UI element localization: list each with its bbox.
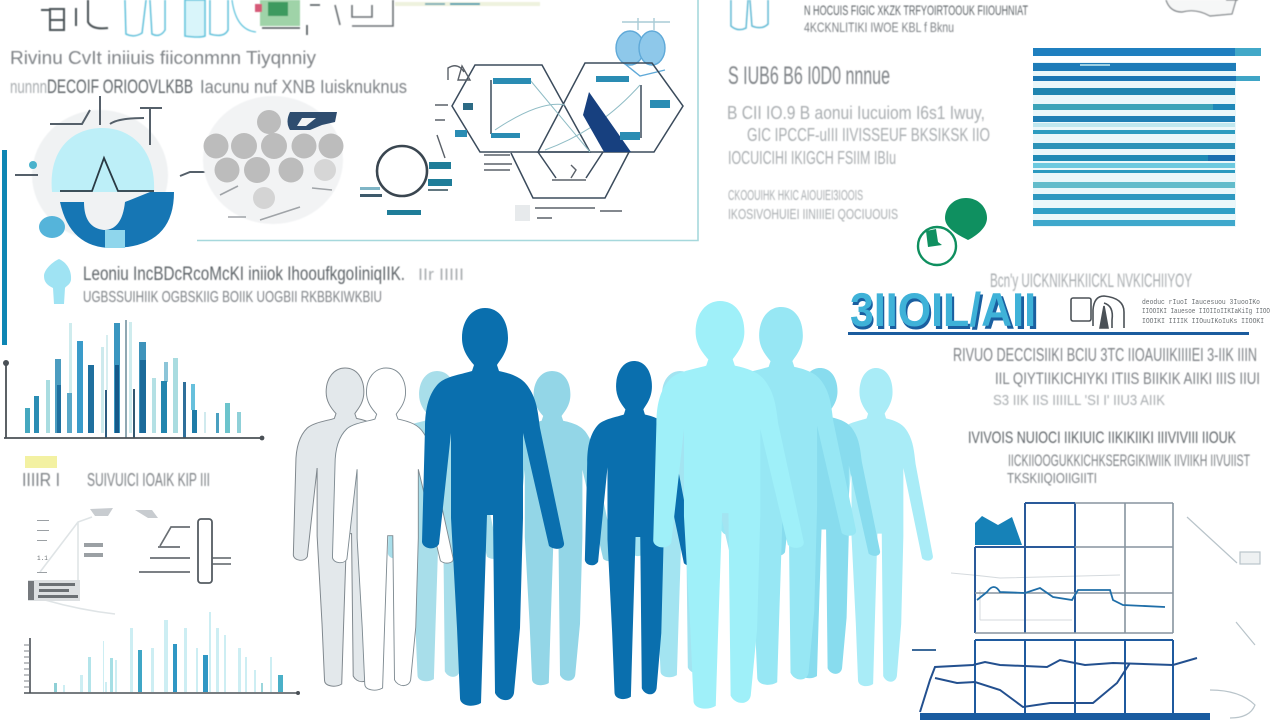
pin text line two: UGBSSUIHIIK OGBSKIIG BOIIK UOGBII RKBBKIWKBIU <box>83 289 382 306</box>
pin text faded: IIr IIIII <box>418 265 464 284</box>
yellow highlight <box>25 456 57 468</box>
path with leaders <box>139 527 190 572</box>
grid lines <box>975 640 1173 713</box>
icon: light blue pin <box>44 259 71 304</box>
chart: upper grid with line <box>951 503 1173 633</box>
icon: cropped map outline <box>1166 0 1238 16</box>
person: dark blue small <box>585 361 696 699</box>
icon: cropped dark glyphs <box>41 0 108 30</box>
person: light blue back <box>388 371 499 681</box>
trend line lower <box>935 663 1130 707</box>
text block: middle right <box>727 62 990 223</box>
icon: ring with labels <box>360 146 452 215</box>
big title: 3IIOIL/AII <box>850 283 1036 336</box>
green pin <box>945 198 987 240</box>
sketch: faint map lines <box>1187 517 1260 718</box>
person: pale right back <box>831 368 933 686</box>
first paragraph line three: S3 IIK IIS IIIILL 'SI I' IIU3 AIIK <box>993 392 1165 409</box>
ring <box>377 146 427 196</box>
person: bright aqua front <box>653 301 804 709</box>
heading line two: nunnn <box>10 77 47 97</box>
text block: pin row <box>44 259 464 306</box>
big title shadow: 3IIOIL/AII <box>851 286 1039 339</box>
icon: grey circle cluster <box>203 96 344 224</box>
axis ticks <box>24 645 30 687</box>
hexagon outlines <box>452 63 683 198</box>
person: aqua left back <box>631 371 742 677</box>
text block: title area <box>848 271 1270 339</box>
pale backdrop <box>32 110 168 240</box>
dark parallelogram <box>583 92 631 152</box>
icon: cropped light blue legs <box>125 0 256 37</box>
paragraph line one: B CII IO.9 B aonui Iucuiom I6s1 Iwuy, <box>727 103 985 123</box>
paragraph line five: IKOSIVOHUIEI IINIIIEI QOCIUOUIS <box>728 206 898 223</box>
top line two: 4KCKNLITIKI IWOE KBL f Bknu <box>804 19 954 35</box>
heading line two bold: DECOIF ORIOOVLKBB <box>47 77 193 98</box>
second paragraph line three: TKSKIIQIOIIGIITI <box>1007 470 1097 487</box>
pale block <box>515 205 530 221</box>
green flag <box>926 229 942 247</box>
bars <box>54 612 283 692</box>
person: teal back <box>502 371 615 685</box>
small glyphs <box>435 66 622 218</box>
labels <box>360 162 452 215</box>
top strip: cropped icons <box>41 0 1238 37</box>
icon: monitor and arch <box>1071 296 1124 328</box>
icon: cropped green chip <box>255 0 320 35</box>
paragraph line four: CKOOUIHK HKIC AIOUIEI3IOOIS <box>728 187 863 204</box>
grey wedges <box>90 508 158 518</box>
trend line upper <box>920 658 1197 712</box>
top strip colour <box>395 2 540 6</box>
stripe backdrop <box>1033 62 1236 227</box>
dark lower ring <box>60 192 174 248</box>
paragraph line two: GIC IPCCF-uIII IIVISSEUF BKSIKSK IIO <box>747 125 990 145</box>
small tag <box>912 649 936 651</box>
figures: group of people <box>293 301 933 709</box>
left lobe <box>39 216 65 238</box>
person: white outlined <box>332 368 453 690</box>
pale curve <box>40 517 115 614</box>
chart: horizontal stripes <box>1033 48 1261 227</box>
dark lozenge <box>288 112 337 130</box>
note line one: deoduc rIuoI Iaucesuou 3IuooIKo <box>1142 299 1260 307</box>
text block: upper left heading <box>10 48 407 98</box>
green ring <box>918 227 956 265</box>
icon: cropped box outline <box>335 0 393 26</box>
stripes <box>1033 48 1261 226</box>
paragraph line three: IOCUICIHI IKIGCH FSIIM IBIu <box>728 148 896 168</box>
axis nodes <box>3 360 264 440</box>
arrow node <box>296 691 300 695</box>
circles <box>204 110 344 209</box>
pale backdrop <box>203 96 343 224</box>
top line one: N HOCUIS FIGIC XKZK TRFYOIRTOOUK FIIOUHNIAT <box>804 2 1028 18</box>
connector nodes <box>29 161 37 169</box>
person: aqua tall back <box>721 307 856 685</box>
panel frame: top left diagrams <box>197 0 698 240</box>
blue shape <box>975 516 1022 545</box>
small note <box>1142 299 1270 326</box>
sub heading: S IUB6 B6 I0D0 nnnue <box>728 62 890 90</box>
bottom bar <box>920 713 1210 720</box>
heading line one: Rivinu CvIt iniiuis fiiconmnn Tiyqnniy <box>10 48 316 68</box>
bracket connector <box>212 558 231 564</box>
person: dark blue large <box>422 308 564 706</box>
bar chart: upper left <box>3 320 264 440</box>
axis tick labels: 1.1 <box>37 555 48 562</box>
grid lines light <box>975 503 1173 633</box>
label left: IIIIR I <box>22 470 60 490</box>
sketch strokes <box>1187 517 1255 718</box>
text block: top right <box>804 2 1028 35</box>
light dome <box>52 128 154 192</box>
heading line two rest: Iacunu nuf XNB Iuisknuknus <box>200 77 407 97</box>
text block: highlighted label <box>22 456 210 490</box>
note line three: IOOIKI IIIIK IIOuuIKoIuKs IIOOKI <box>1142 318 1264 326</box>
bar chart: lower left <box>24 612 300 695</box>
small ticks <box>220 186 332 220</box>
grid lines <box>975 503 1075 633</box>
connectors <box>15 96 207 176</box>
sketch box <box>1240 552 1260 564</box>
label right: SUIVUICI IOAIK KIP III <box>87 470 210 490</box>
text block: right paragraphs <box>953 345 1260 487</box>
accent bar: left edge <box>2 150 7 345</box>
title rule <box>848 332 1249 335</box>
centre tab <box>105 230 125 248</box>
faint outline behind <box>951 573 1120 620</box>
circles on top <box>616 18 670 76</box>
dark data table <box>28 580 80 601</box>
bracket box <box>198 519 212 583</box>
person: grey back <box>293 368 410 686</box>
icon: circular dome diagram <box>15 96 207 248</box>
pin text line one: Leoniu IncBDcRcoMcKI iniiok IhooufkgoIiniqIIK. <box>83 264 405 285</box>
chart: lower grid with lines <box>912 640 1210 720</box>
trend line <box>977 587 1165 607</box>
small labels <box>37 520 103 573</box>
person: mid aqua back <box>772 368 880 678</box>
blue labels <box>455 76 670 140</box>
axes <box>24 638 299 693</box>
diagram: hexagons <box>435 18 683 221</box>
bars <box>25 320 241 438</box>
icon: green pin and ring <box>918 198 987 265</box>
diagram: small chart with bracket <box>28 508 231 614</box>
axes <box>4 363 262 438</box>
icon: cropped legs right <box>731 0 768 30</box>
pulse line <box>60 158 154 191</box>
